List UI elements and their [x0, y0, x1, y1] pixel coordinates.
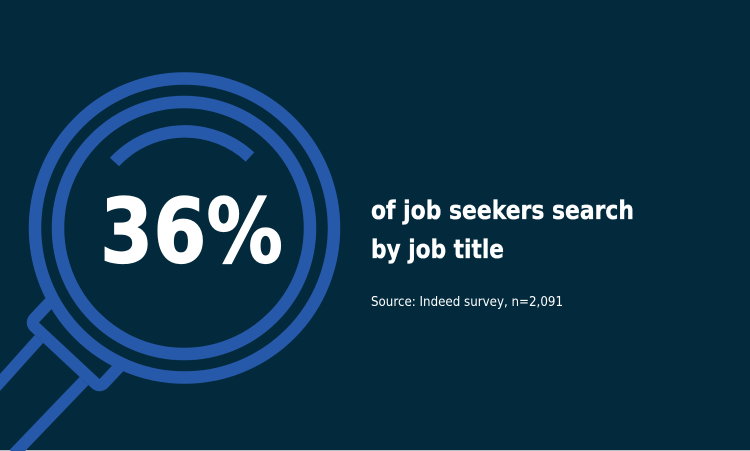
text block: description: of job seekers search [371, 196, 634, 226]
text block: description [371, 196, 634, 265]
statistic: 36%: 36% [100, 179, 283, 283]
icon: magnifying glass [0, 78, 334, 451]
text block: source: Source: Indeed survey, n=2,091 [371, 294, 563, 310]
text block: description: by job title [371, 235, 504, 265]
